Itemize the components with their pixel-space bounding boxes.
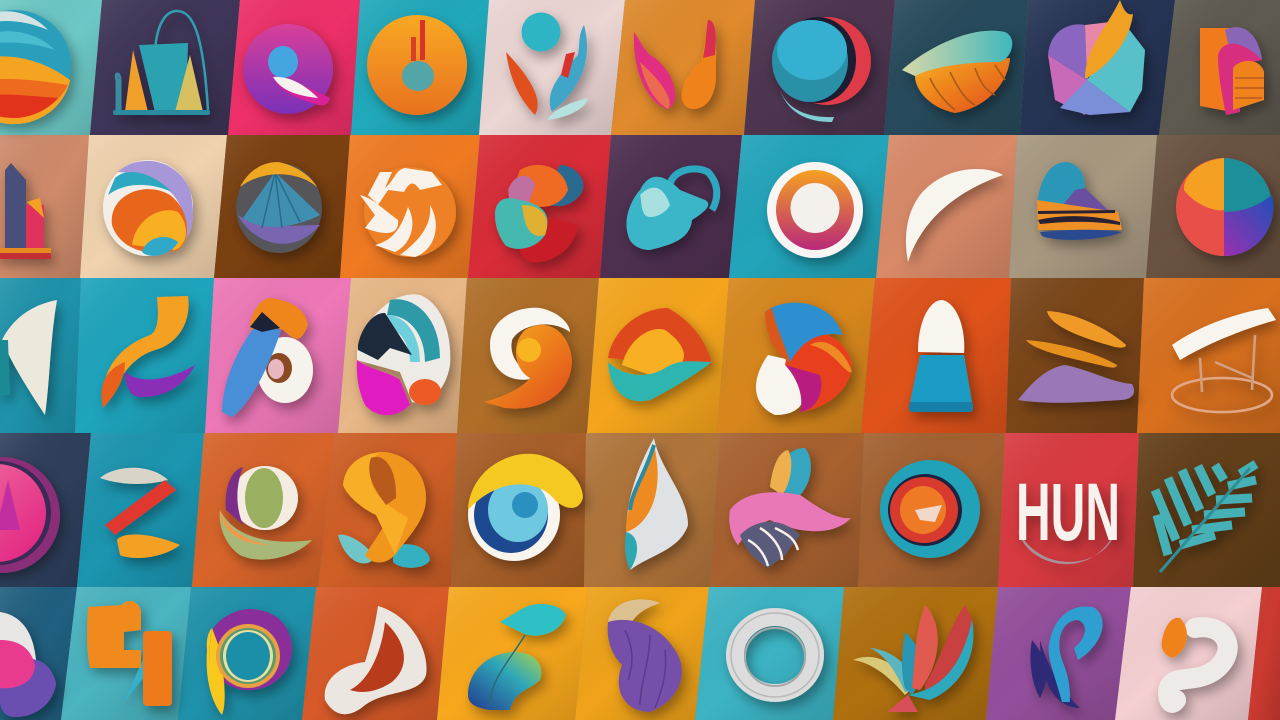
- icon: white crescent: [906, 169, 1003, 262]
- icon: quartered disc: [1176, 158, 1273, 256]
- icon: teal disc with orange core: [880, 460, 980, 558]
- icon: pink wing: [729, 448, 851, 568]
- icon: striped wave blob: [0, 10, 71, 124]
- icon: blue hook: [1030, 607, 1103, 708]
- icon: purple egg with swoosh: [243, 24, 333, 114]
- icon: twin leaves: [634, 20, 716, 109]
- icon: pink half disc: [0, 612, 56, 717]
- icon: orange block arch: [1200, 27, 1264, 115]
- icon: white swoosh: [325, 606, 427, 714]
- icon: white bar on glass dome: [1172, 308, 1276, 412]
- icon: white curl: [1162, 618, 1228, 703]
- icon: orange block S: [87, 601, 172, 706]
- icon: HUN letters: [1016, 467, 1120, 564]
- icon: teal cloud: [626, 169, 717, 250]
- icon: teal feather: [1155, 464, 1256, 572]
- icon: orange swirl: [484, 308, 572, 409]
- icon: HUN letters: HUN: [1016, 467, 1120, 558]
- icon: strokes over mesh mound: [1018, 311, 1134, 403]
- icon: swirled knot: [495, 165, 583, 262]
- icon: wave blob: [608, 308, 712, 401]
- icon: paint brush: [909, 300, 973, 412]
- icon: layered wedge: [1037, 162, 1122, 240]
- icon: petal flower: [1048, 0, 1145, 115]
- icon: teal leaf sprig: [468, 604, 566, 710]
- icon: pink target disc: [0, 457, 60, 573]
- icon: orange S ribbon: [101, 296, 195, 408]
- icon: purple wave: [608, 599, 682, 712]
- icon: feather spray: [853, 605, 973, 712]
- icon: peach swirl disc: [103, 160, 193, 256]
- icon: rainbow rings: [207, 609, 292, 715]
- icon: tower: [0, 163, 51, 259]
- icon: scattered leaves: [506, 12, 588, 120]
- icon: orange ribbon loop: [338, 452, 430, 568]
- icon: Z leaves: [100, 468, 180, 558]
- icon: layered sphere: [772, 17, 871, 122]
- icon: ring with leaf: [220, 466, 312, 560]
- icon: helmet: [357, 294, 450, 415]
- icon: triangle bag: [113, 11, 210, 115]
- icon: orange disc with white strokes: [360, 167, 456, 257]
- icon: white sail: [0, 300, 57, 415]
- icon: concentric ring: [767, 162, 863, 258]
- icon: blue spiral: [468, 454, 583, 561]
- icon: faceted dark disc: [236, 162, 322, 253]
- icon: teardrop: [625, 438, 688, 570]
- icon: blue feather with ring: [222, 298, 313, 417]
- icon: orange disc with needle: [367, 15, 467, 115]
- icon: feather fan: [902, 31, 1012, 113]
- icon: striped ball: [756, 303, 852, 415]
- icon: white ring: [731, 613, 819, 697]
